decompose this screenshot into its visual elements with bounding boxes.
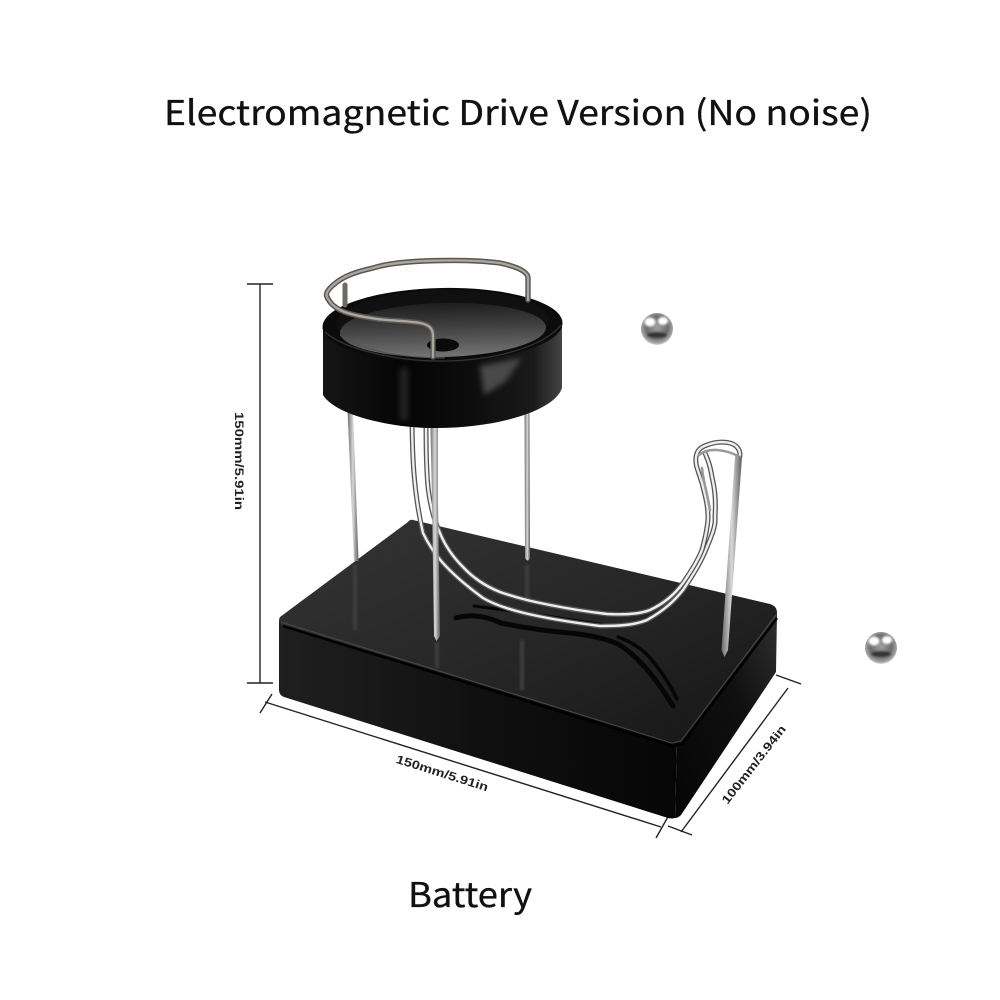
- disc recess floor: [339, 300, 547, 360]
- back support rod: [524, 410, 530, 560]
- depth dimension line: [668, 675, 801, 835]
- disc top rim: [322, 286, 563, 364]
- product: wooden base: [279, 520, 777, 818]
- base edge highlight: [281, 615, 776, 743]
- disc side highlights: [400, 358, 522, 420]
- wire top knot: [699, 450, 740, 510]
- disc side wall: [323, 327, 562, 428]
- steel ball upper: [641, 313, 673, 345]
- base right side face: [675, 613, 777, 818]
- disc center hole: [427, 338, 459, 352]
- front support rod: [430, 410, 440, 641]
- right support rod: [722, 456, 742, 657]
- left support rod: [348, 410, 358, 561]
- height dimension line: [247, 284, 273, 683]
- steel ball lower: [865, 632, 897, 664]
- base reflections: [456, 606, 677, 706]
- battery label: Battery: [408, 868, 532, 917]
- height dimension label: 150mm/5.91in: [232, 412, 246, 510]
- base top face: [279, 520, 777, 743]
- outer wire track: [412, 410, 715, 626]
- depth dimension label: 100mm/3.94in: [719, 722, 789, 807]
- disc rim highlight: [325, 325, 561, 361]
- width dimension line: [260, 694, 669, 838]
- base edge shadow: [283, 618, 777, 746]
- width dimension label: 150mm/5.91in: [394, 752, 490, 794]
- base left front face: [279, 621, 677, 818]
- title: Electromagnetic Drive Version (No noise): [164, 86, 872, 135]
- top wire guide: [326, 260, 528, 357]
- wire track: [412, 410, 740, 626]
- inner wire track: [426, 410, 740, 614]
- disc recess wall: [336, 288, 549, 356]
- product: electromagnet disc: [322, 286, 563, 428]
